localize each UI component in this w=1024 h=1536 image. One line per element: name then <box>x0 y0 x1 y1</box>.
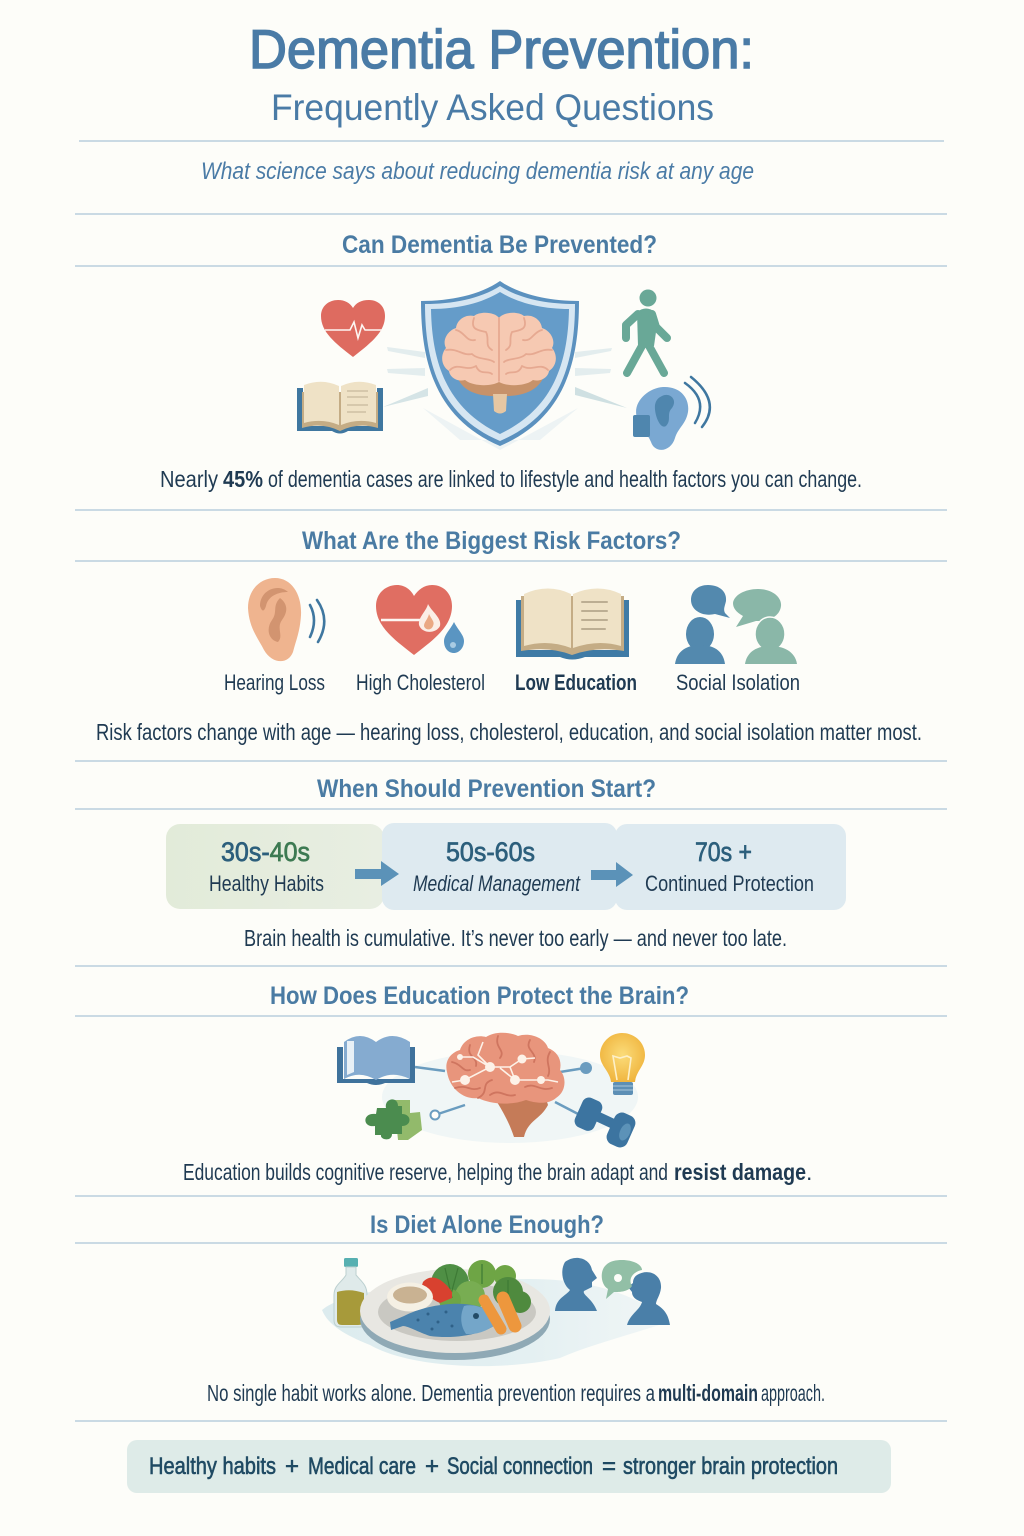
arrow: stage one to two <box>355 861 399 886</box>
statement text: Brain health is cumulative. It’s never too early — and never too late. <box>244 925 787 951</box>
icon: dumbbell <box>572 1095 638 1150</box>
icon: plate of food <box>360 1260 550 1360</box>
heading: When Should Prevention Start? <box>317 775 656 803</box>
icon: heart with cholesterol drop <box>376 585 464 655</box>
statement text: Education builds cognitive reserve, helping the brain adapt and <box>183 1159 668 1185</box>
icon: speech bubble <box>602 1260 642 1299</box>
timeline stage: 50s-60s: Medical Management <box>413 871 581 896</box>
panel: biggest risk factors <box>96 527 922 745</box>
statement text: multi-domain <box>658 1380 758 1406</box>
greens <box>431 1260 531 1313</box>
icon: olive oil bottle <box>334 1258 367 1327</box>
icon: blue book <box>337 1036 415 1085</box>
summary banner: + <box>425 1453 439 1480</box>
subtitle: Frequently Asked Questions <box>271 87 714 128</box>
statement text: No single habit works alone. Dementia prevention requires a <box>207 1380 655 1406</box>
icon: open book <box>516 588 629 660</box>
background wash <box>322 1279 668 1366</box>
statement text: . <box>806 1159 812 1185</box>
icon: brain with network <box>446 1033 565 1137</box>
summary banner: Healthy habits <box>149 1453 276 1480</box>
icon: heart <box>321 300 385 357</box>
statement text: of dementia cases are linked to lifestyle and health factors you can change. <box>268 466 862 492</box>
icon: people talking <box>555 1258 670 1325</box>
label: hearing loss: Hearing Loss <box>224 670 325 695</box>
timeline stage: 70s plus: Continued Protection <box>645 871 814 896</box>
timeline stage: 30s-40s: 30s-40s <box>221 837 310 867</box>
carrots <box>484 1298 515 1329</box>
arrow: stage two to three <box>591 862 633 887</box>
summary banner: Social connection <box>447 1453 593 1480</box>
timeline stage: 50s-60s <box>382 823 617 910</box>
summary banner <box>127 1440 891 1493</box>
shield rays <box>383 347 627 450</box>
summary banner: stronger brain protection <box>623 1453 838 1480</box>
icon: light bulb <box>600 1033 645 1095</box>
label: high cholesterol: High Cholesterol <box>356 670 485 695</box>
connector lines <box>415 1067 585 1115</box>
icon: walking person <box>626 290 667 373</box>
summary banner: = <box>602 1453 616 1480</box>
summary banner: Medical care <box>308 1453 416 1480</box>
background glow <box>382 1051 638 1143</box>
statement text <box>160 466 862 492</box>
panel: is diet alone enough <box>207 1211 825 1406</box>
label: social isolation: Social Isolation <box>676 670 800 695</box>
sauce bowl <box>387 1282 433 1312</box>
panel: can dementia be prevented <box>160 231 862 492</box>
timeline stage: 30s-40s <box>166 824 384 909</box>
fish <box>390 1304 500 1337</box>
icon: shield with brain <box>421 281 579 446</box>
icon: ear with sound waves <box>633 377 710 450</box>
header <box>201 18 754 185</box>
panel: when should prevention start <box>166 775 846 951</box>
title: Dementia Prevention: <box>249 18 754 80</box>
connector end: right node <box>580 1062 592 1074</box>
heading: Can Dementia Be Prevented? <box>342 231 657 259</box>
timeline stage: 50s-60s: 50s-60s <box>446 837 535 867</box>
heading: Is Diet Alone Enough? <box>370 1211 604 1239</box>
tomato <box>421 1277 452 1303</box>
summary banner: + <box>285 1453 299 1480</box>
statement text: resist damage <box>674 1159 806 1185</box>
tagline: What science says about reducing dementia risk at any age <box>201 158 754 185</box>
icon: hearing loss ear <box>248 578 324 661</box>
label: low education: Low Education <box>515 670 637 695</box>
icon: social isolation people <box>675 585 797 664</box>
timeline stage: 30s-40s: Healthy Habits <box>209 871 324 896</box>
heading: What Are the Biggest Risk Factors? <box>302 527 681 555</box>
statement text: Nearly <box>160 466 218 492</box>
heading: How Does Education Protect the Brain? <box>270 982 689 1010</box>
statement text: 45% <box>223 466 263 492</box>
icon: open book <box>297 382 383 434</box>
timeline stage: 70s plus: 70s + <box>695 837 752 867</box>
timeline stage: 70s plus <box>615 824 846 910</box>
connector end: left node <box>430 1110 440 1120</box>
statement text: approach. <box>761 1380 825 1406</box>
icon: puzzle pieces <box>365 1099 422 1140</box>
panel: how education protects the brain <box>183 982 812 1185</box>
